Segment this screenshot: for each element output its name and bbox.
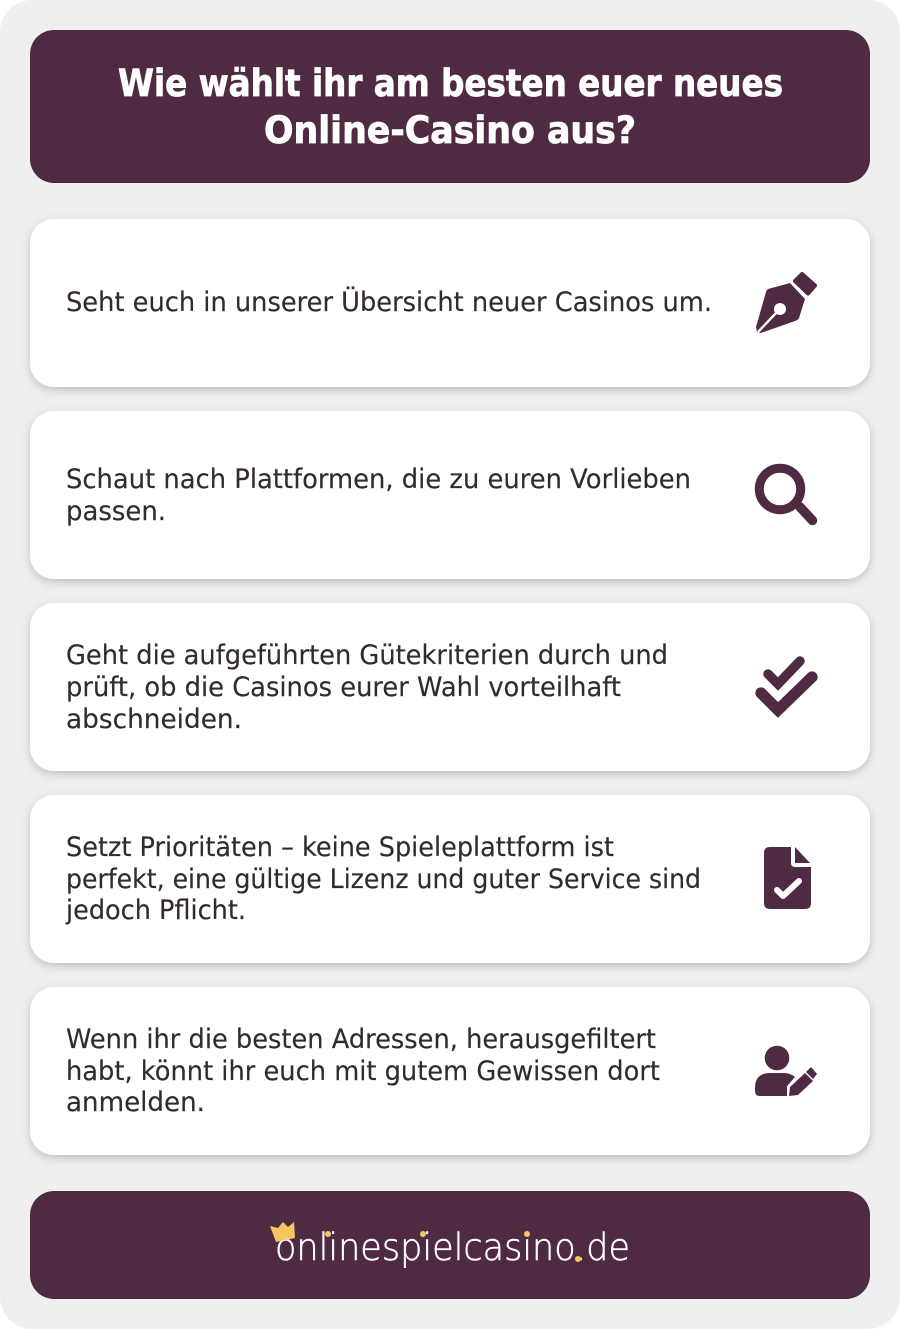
panel: step 5: Wenn ihr die besten Adressen, herausgefiltert [66, 1024, 656, 1055]
title banner: Wie wählt ihr am besten euer neues [118, 62, 783, 105]
panel: step 5: habt, könnt ihr euch mit gutem Gewissen dort [66, 1056, 660, 1087]
icon: user with pencil [755, 1046, 817, 1096]
panel: step 2: passen. [66, 496, 166, 527]
panel: step 3: Geht die aufgeführten Gütekriterien durch und [66, 640, 668, 671]
panel: step 3: abschneiden. [66, 704, 242, 735]
icon: magnifying glass [759, 468, 812, 520]
panel: step 3: prüft, ob die Casinos eurer Wahl vorteilhaft [66, 672, 621, 703]
panel: step 2 [30, 411, 870, 579]
title banner [30, 30, 870, 183]
panel: step 4: jedoch Pflicht. [65, 895, 246, 926]
panel: step 3 [30, 603, 870, 771]
panel: step 1 [30, 219, 870, 387]
icon: crown [270, 1222, 295, 1242]
panel: step 2: Schaut nach Plattformen, die zu euren Vorlieben [66, 464, 691, 495]
panel: step 1: Seht euch in unserer Übersicht neuer Casinos um. [66, 286, 712, 318]
footer banner [30, 1191, 870, 1299]
icon: double check mark [761, 661, 812, 710]
panel: step 5 [30, 987, 870, 1155]
panel: step 5: anmelden. [66, 1087, 205, 1118]
panel: step 4: Setzt Prioritäten – keine Spieleplattform ist [66, 832, 614, 863]
logo wordmark: onlinespielcasino.de [275, 1226, 630, 1269]
icon: document with check [764, 847, 811, 909]
icon: fountain pen nib [756, 274, 815, 333]
panel: step 4 [30, 795, 870, 963]
title banner: Online-Casino aus? [264, 109, 636, 152]
logo gold dots [325, 1231, 581, 1262]
panel: step 4: perfekt, eine gültige Lizenz und guter Service sind [66, 864, 701, 895]
